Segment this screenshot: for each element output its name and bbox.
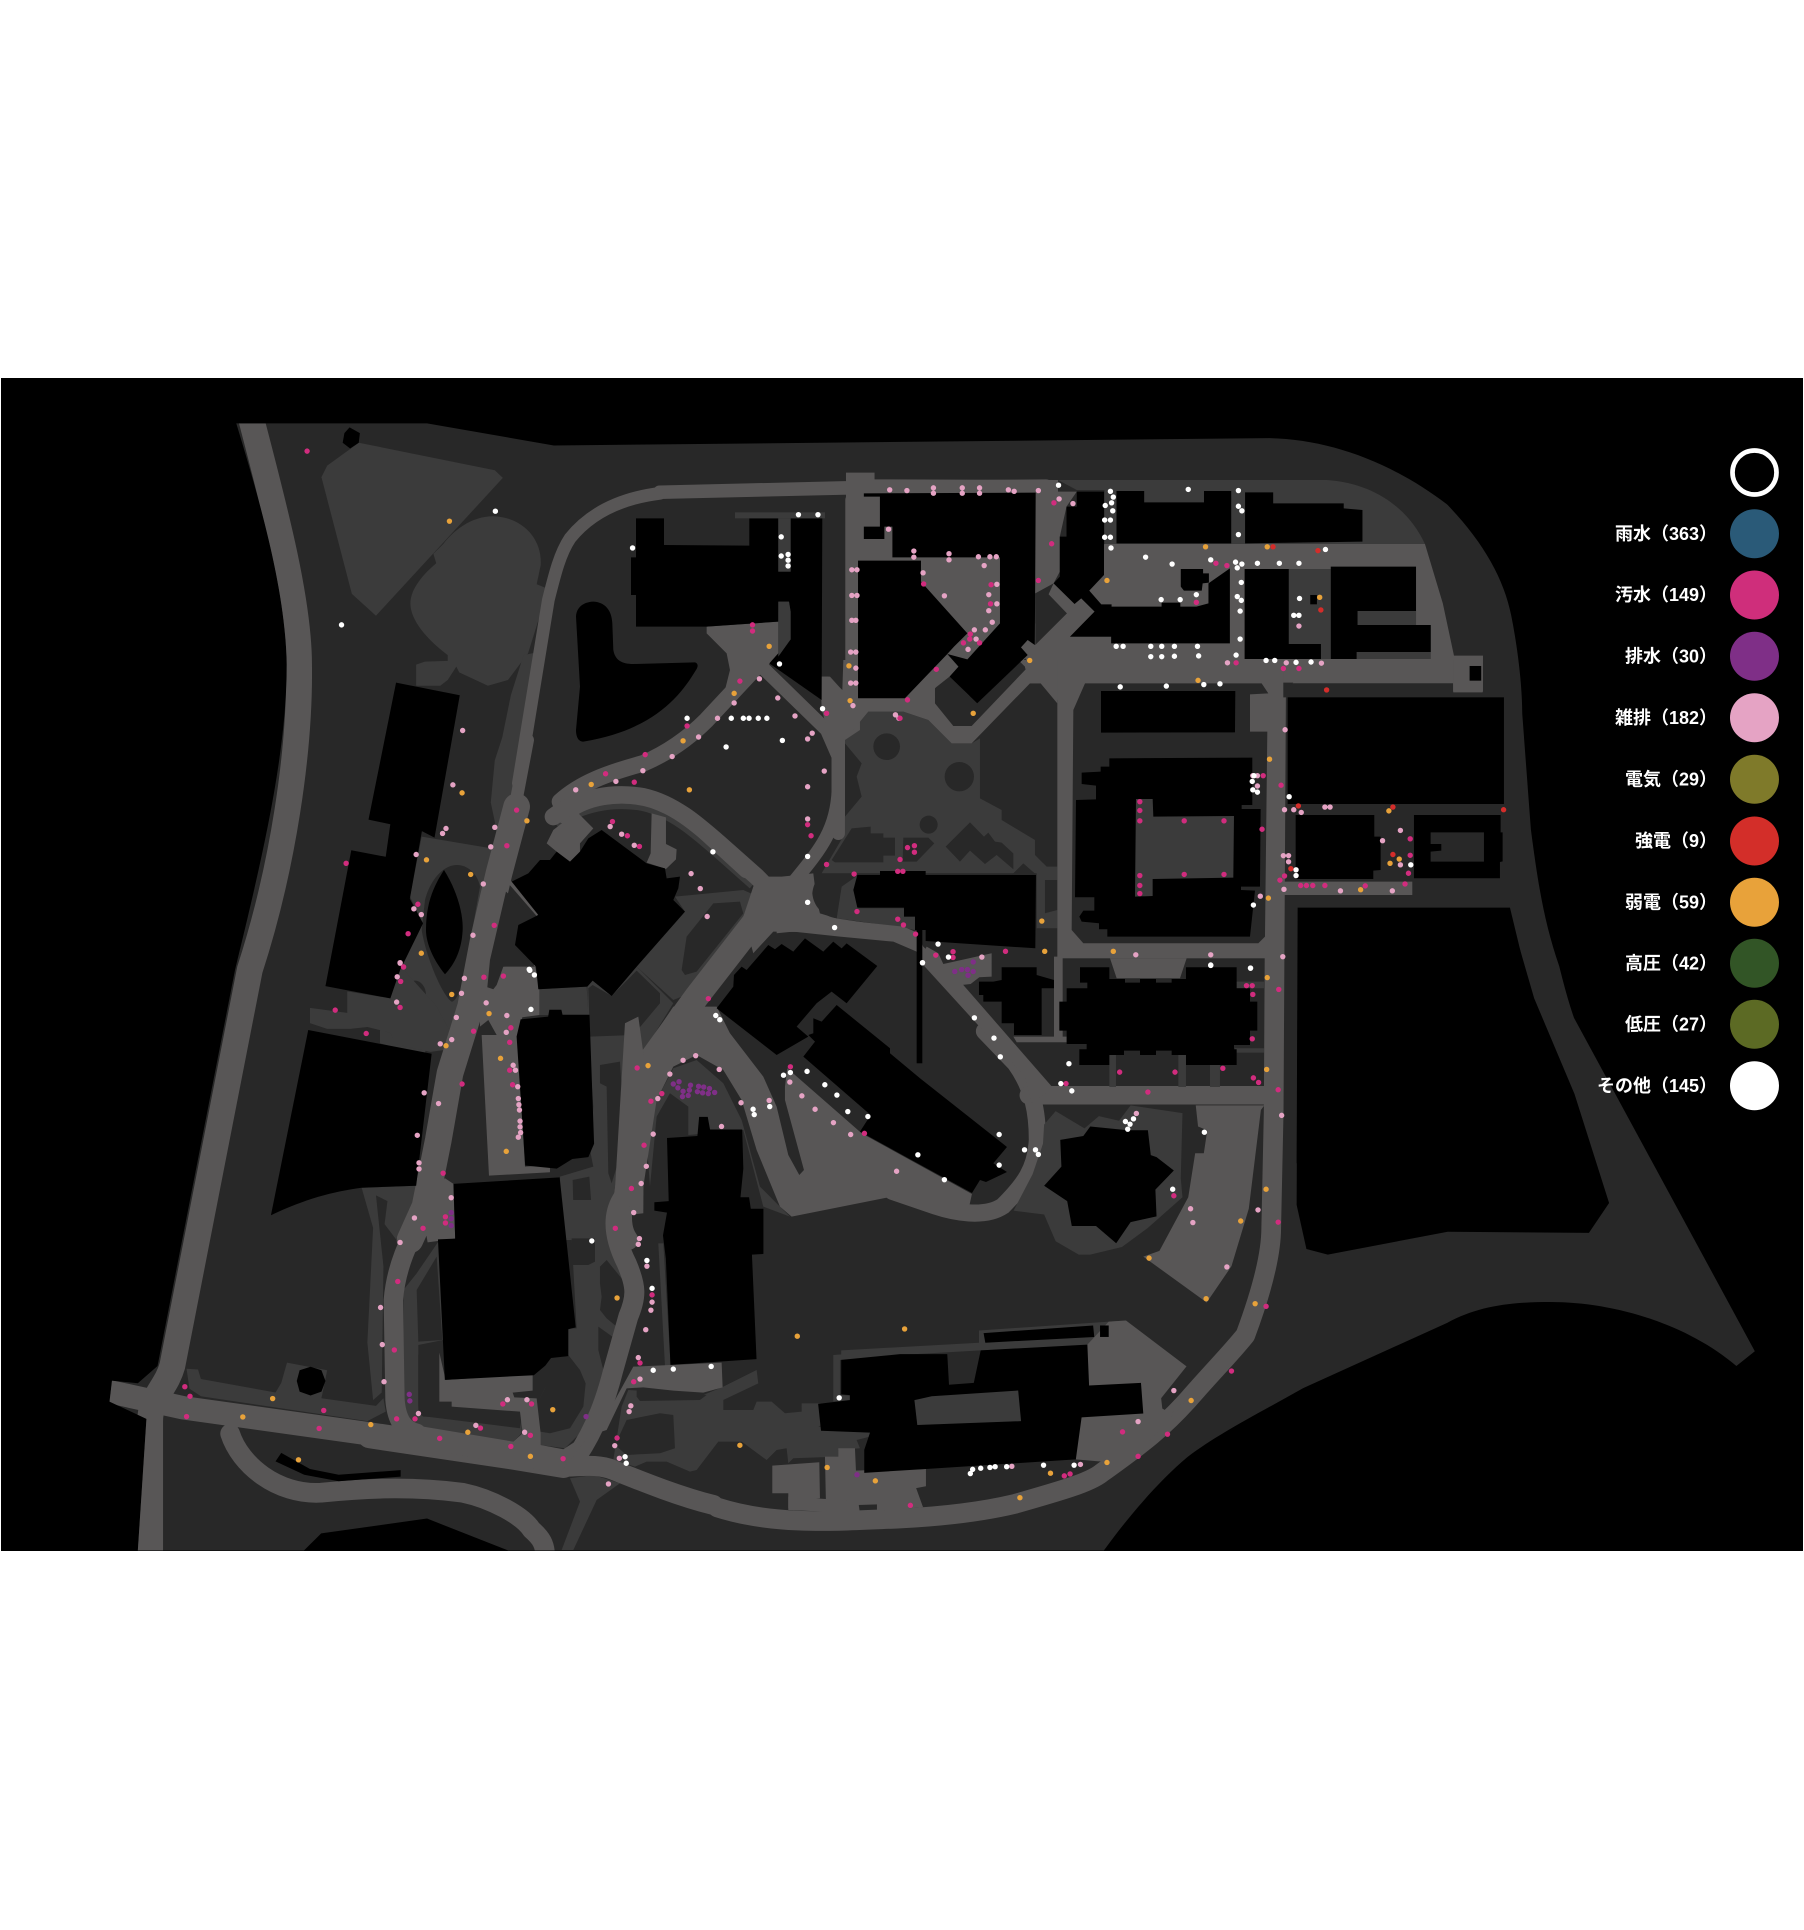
south central secondary grounds xyxy=(403,1200,880,1550)
service strips, north central xyxy=(735,512,825,657)
buildings, diagonal and plaza south xyxy=(803,871,1054,1193)
legend: other: その他（145） xyxy=(1597,1076,1717,1096)
secondary grounds, north west xyxy=(321,443,548,845)
legend: high current xyxy=(1635,816,1779,866)
legend: electric: 電気（29） xyxy=(1625,768,1717,790)
manhole markers, north west xyxy=(307,451,900,969)
legend: gray water xyxy=(1615,693,1779,742)
legend: drainage: 排水（30） xyxy=(1625,646,1717,666)
paved roads and court, west of buildings xyxy=(422,1178,455,1242)
paved band, upper north xyxy=(846,473,1483,710)
campus land silhouette xyxy=(110,423,1755,1551)
map background xyxy=(1,378,1803,1551)
buildings, south east xyxy=(818,1126,1174,1473)
buildings, south west xyxy=(271,1010,763,1481)
manhole markers, north east xyxy=(900,485,1504,968)
legend: rainwater: 雨水（363） xyxy=(1615,524,1717,544)
legend: other xyxy=(1597,1061,1779,1110)
legend: low voltage: 低圧（27） xyxy=(1625,1014,1717,1034)
legend: high voltage xyxy=(1625,939,1779,988)
buildings, central xyxy=(512,830,877,1055)
buildings, west xyxy=(325,427,460,998)
campus roads, south xyxy=(370,1200,913,1513)
legend: low current: 弱電（59） xyxy=(1625,892,1717,912)
legend: rainwater xyxy=(1615,509,1779,558)
central court xyxy=(1135,799,1234,897)
legend: high voltage: 高圧（42） xyxy=(1625,954,1717,974)
legend: sewage xyxy=(1615,570,1779,620)
buildings, east blocks xyxy=(1059,691,1504,1065)
legend: low voltage xyxy=(1625,1000,1779,1049)
right black lot, upper xyxy=(1297,908,1550,1163)
building and pond, north central xyxy=(576,518,822,742)
manhole markers, south east xyxy=(905,962,1282,1505)
legend: gray water: 雑排（182） xyxy=(1615,708,1717,728)
west and central secondary grounds xyxy=(380,799,790,1240)
legend: high current: 強電（9） xyxy=(1635,831,1717,851)
garden around round building xyxy=(1014,1105,1182,1255)
legend: sewage: 汚水（149） xyxy=(1615,585,1717,605)
campus roads, north west ring xyxy=(518,493,860,870)
campus roads, central xyxy=(410,740,972,1240)
perimeter and long roads xyxy=(105,418,1276,1557)
central plaza paved edges xyxy=(777,660,1057,1103)
lens pond xyxy=(426,870,463,974)
manhole markers, south west xyxy=(185,963,897,1484)
legend: low current xyxy=(1625,878,1779,927)
south building courtyard xyxy=(914,1391,1021,1425)
south east paved areas xyxy=(877,1105,1264,1511)
legend: drainage xyxy=(1625,632,1779,681)
south east secondary grounds xyxy=(841,1321,1126,1360)
south west secondary grounds xyxy=(187,968,459,1421)
north complex grounds xyxy=(1058,480,1425,544)
legend: all markers ring xyxy=(1732,450,1776,494)
east block court xyxy=(1431,832,1484,862)
central plaza ground xyxy=(822,712,1057,930)
ring road grounds around north block xyxy=(1013,660,1483,1087)
legend: electric xyxy=(1625,755,1779,804)
right black lot, lower xyxy=(1297,949,1609,1255)
legend xyxy=(1597,450,1779,1110)
buildings, north complex xyxy=(858,491,1481,703)
